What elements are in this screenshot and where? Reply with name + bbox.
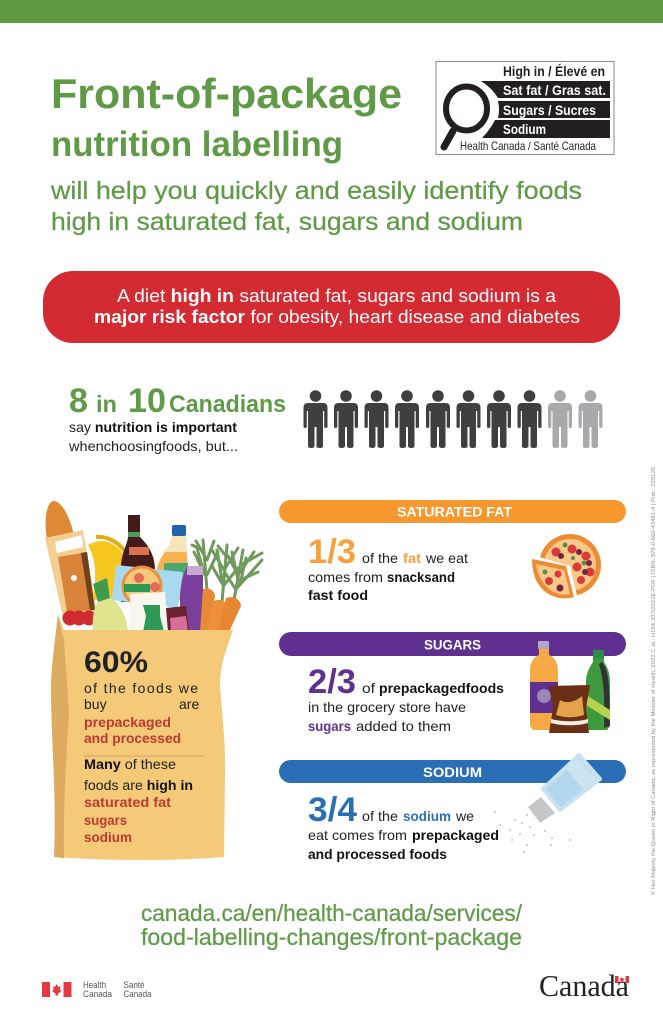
illustration: groceries [45,501,262,634]
bag text: 60%: prepackaged [84,714,171,730]
subtitle: will help you quickly and easily identify foods [50,177,582,205]
pictogram: 8 of 10 people [304,390,602,448]
Health Canada signature: Health [83,980,106,990]
sodium pill [279,760,626,783]
website link [141,900,523,950]
saturated fat text: fast food [308,587,368,603]
sodium text: prepackaged [412,827,499,843]
statistic: 8 in 10 Canadians: Canadians [169,391,286,418]
nutrition symbol: high in label: Health Canada / Santé Canada [460,139,596,153]
sodium text: of the [362,808,398,824]
bag text: 60%: are [179,696,199,712]
bag text: many foods: sugars [84,812,127,828]
nutrition symbol: high in label: Sugars / Sucres [503,103,596,118]
bag text: 60%: of the foods we [84,680,198,696]
bottle of syrup [121,515,155,602]
statistic: 8 in 10 Canadians [68,382,286,454]
website link: food-labelling-changes/front-package [141,924,522,950]
sugars text [308,663,504,734]
saturated fat text: of the [362,550,398,566]
nutrition symbol: high in label: Sodium [503,122,546,137]
saturated fat pill: SATURATED FAT [397,504,512,520]
baguette [46,501,74,540]
red banner [43,271,620,343]
carrot tops [192,540,262,602]
sugars text: 2/3 [308,663,356,701]
red banner: major risk factor for obesity, heart disease and diabetes [94,306,580,327]
sugars text: in the grocery store have [308,699,466,715]
sugars text: prepackagedfoods [379,680,504,696]
sodium pill: SODIUM [423,764,482,780]
saturated fat text: snacksand [387,569,455,585]
Canada wordmark: Canada [539,968,629,1003]
tomatoes [62,610,96,626]
sodium text: we [455,808,474,824]
statistic: 8 in 10 Canadians: 10 [128,382,166,420]
copyright note: © Her Majesty the Queen in Right of Canada, as represented by the Minister of Health, 2022 C at.: H164-337/2022E-PDF | ISBN: 978-0-660-43461-4 | Pub.: 220125 [650,467,657,895]
sodium text [308,791,499,862]
nutrition symbol: high in label [436,62,614,154]
bag text: 60%: buy [84,696,107,712]
saturated fat pill [279,500,626,523]
sugars text: of [362,680,375,696]
bag text: many foods: saturated fat [84,794,171,810]
saturated fat text: 1/3 [308,533,356,571]
icon: salt shaker [494,755,600,853]
pizza box [112,565,183,608]
saturated fat text [308,533,468,603]
Health Canada signature: Canada [124,989,152,999]
subtitle: high in saturated fat, sugars and sodium [51,208,523,236]
subtitle [50,177,582,236]
sugars text: added to them [356,718,451,734]
statistic: 8 in 10 Canadians: say nutrition is important [69,419,237,435]
Health Canada signature [42,980,152,999]
purple carton [180,566,203,632]
sodium text: sodium [403,808,451,824]
grocery bag [51,615,233,860]
title [51,70,402,164]
nutrition symbol: high in label: Sat fat / Gras sat. [503,83,606,98]
nutrition symbol: high in label: High in / Élevé en [503,64,605,79]
statistic: 8 in 10 Canadians: whenchoosingfoods, but... [68,438,238,454]
bag text: 60%: and processed [84,730,181,746]
red banner: A diet high in saturated fat, sugars and sodium is a [117,285,557,306]
sodium text: and processed foods [308,846,447,862]
title: nutrition labelling [51,125,343,164]
website link: canada.ca/en/health-canada/services/ [141,900,523,926]
sodium text: eat comes from [308,827,407,843]
bag text: 60% [84,646,199,746]
top green bar [0,0,663,23]
saturated fat text: comes from [308,569,383,585]
spray bottle [130,592,168,632]
Health Canada signature: Canada [83,989,113,999]
statistic: 8 in 10 Canadians: 8 [69,382,88,420]
saturated fat text: fat [403,550,421,566]
dressing bottle [93,579,128,632]
bag text: many foods [84,756,193,845]
icon: soft drinks and snack bag [530,641,610,733]
saturated fat text: we eat [425,550,468,566]
bag text: many foods: sodium [84,829,132,845]
statistic: 8 in 10 Canadians: in [96,391,117,417]
bread bag [45,530,97,617]
bag text: many foods: foods are high in [84,777,193,793]
sugars pill: SUGARS [424,636,481,652]
bananas [88,541,128,600]
sugars pill [279,632,626,656]
juice bottle [157,536,188,600]
sugars text: sugars [308,718,351,734]
Health Canada signature: Santé [124,980,144,990]
carrots [196,589,215,632]
sodium text: 3/4 [308,791,357,829]
jam jar [166,606,189,632]
bag text: many foods: Many of these [84,756,176,772]
icon: pizza [524,534,601,606]
bag text: 60%: 60% [84,646,148,679]
title: Front-of-package [51,70,402,117]
